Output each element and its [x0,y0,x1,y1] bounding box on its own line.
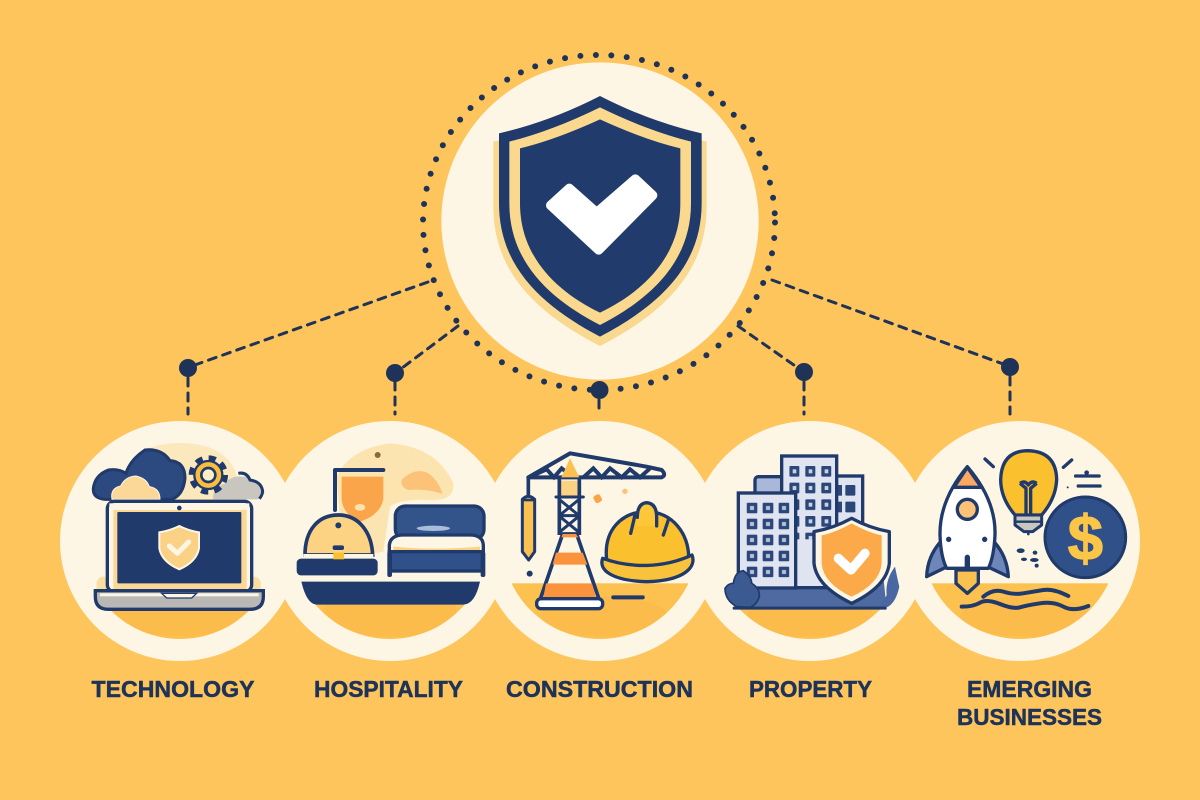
label: emerging businesses: EMERGING [967,676,1092,702]
icon: hard hat [602,503,693,582]
icon: dollar coin [1045,497,1126,578]
panel: hospitality [296,443,486,639]
icon: orange shield [814,518,889,603]
icon: shield [493,96,707,346]
panel: emerging businesses [925,449,1128,639]
icon: waves [962,590,1088,609]
icon: crane [522,453,664,560]
label: emerging businesses [957,676,1102,730]
icon: dollar coin: $ [1068,504,1103,574]
icon: buildings [738,456,863,588]
icon: traffic cone [537,534,603,609]
icon: rocket [927,467,1008,593]
connector nodes [179,358,1019,399]
icon: navy base [301,582,480,605]
panel: property [724,454,900,639]
group: construction and property panels [512,451,900,639]
panel: technology [92,443,265,639]
icon: light bulb [985,451,1072,535]
label: property: PROPERTY [749,676,872,702]
icon: laptop [95,501,263,609]
group: technology and hospitality panels [92,443,486,639]
icon: motion marks [1017,470,1102,568]
icon: small shield [159,526,199,569]
dotted ring around hub [423,55,775,390]
label: emerging businesses: BUSINESSES [957,704,1102,730]
panel: construction [512,451,695,639]
icon: lamp arm [335,470,383,510]
label: construction: CONSTRUCTION [506,676,693,702]
ground slab [733,577,887,609]
label: hospitality: HOSPITALITY [314,676,463,702]
icon: bushes [725,567,899,608]
icon: service bell [297,515,378,575]
icon: decorative orange shape [401,471,443,494]
icon: gear [193,459,224,491]
cream backing discs for the five sectors [60,421,1140,661]
decorative marks [527,489,645,599]
infographic canvas [60,52,1140,726]
icon: bed [387,506,485,577]
icon: orange glass [342,477,383,522]
label: technology: TECHNOLOGY [92,676,254,702]
central hub: shield with checkmark [441,62,759,380]
icon: clouds [93,450,263,499]
connectors: dashed lines from the hub to the nodes [188,280,1010,414]
